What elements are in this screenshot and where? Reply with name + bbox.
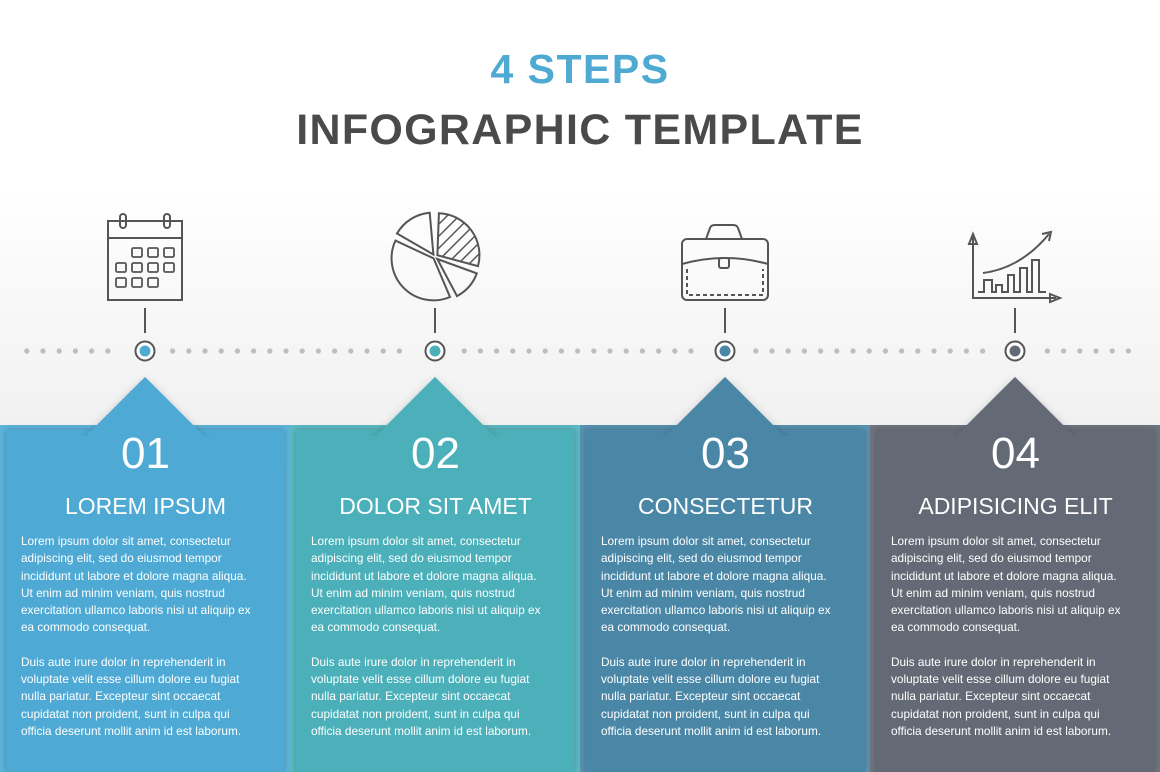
panel texts 3: CONSECTETUR <box>638 493 813 519</box>
icon: calendar <box>107 213 183 301</box>
panel texts 3: Duis aute irure dolor in reprehenderit in voluptate velit esse cillum dolore eu fugiat nulla pariatur. Excepteur sint occaecat cupidatat non proident, sunt in culpa qui officia deserunt mollit anim id est laborum. <box>601 655 821 738</box>
panel 1 <box>0 425 290 772</box>
panel 3 <box>580 425 870 772</box>
panel texts 1: LOREM IPSUM <box>65 493 226 519</box>
title: infographic template: INFOGRAPHIC TEMPLATE <box>296 106 864 154</box>
panel texts 4 <box>891 429 1120 738</box>
icon: briefcase <box>681 224 769 301</box>
panel texts 2: Duis aute irure dolor in reprehenderit in voluptate velit esse cillum dolore eu fugiat nulla pariatur. Excepteur sint occaecat cupidatat non proident, sunt in culpa qui officia deserunt mollit anim id est laborum. <box>311 655 531 738</box>
panel texts 3 <box>601 429 830 738</box>
panel texts 3: Lorem ipsum dolor sit amet, consectetur adipiscing elit, sed do eiusmod tempor incididunt ut labore et dolore magna aliqua. Ut enim ad minim veniam, quis nostrud exercitation ullamco laboris nisi ut aliquip ex ea commodo consequat. <box>601 534 830 634</box>
panel texts 4: ADIPISICING ELIT <box>918 493 1113 519</box>
panel texts 2: Lorem ipsum dolor sit amet, consectetur adipiscing elit, sed do eiusmod tempor incididunt ut labore et dolore magna aliqua. Ut enim ad minim veniam, quis nostrud exercitation ullamco laboris nisi ut aliquip ex ea commodo consequat. <box>311 534 540 634</box>
panel texts 4: Lorem ipsum dolor sit amet, consectetur adipiscing elit, sed do eiusmod tempor incididunt ut labore et dolore magna aliqua. Ut enim ad minim veniam, quis nostrud exercitation ullamco laboris nisi ut aliquip ex ea commodo consequat. <box>891 534 1120 634</box>
panel texts 3: 03 <box>701 429 750 478</box>
panel texts 4: 04 <box>991 429 1040 478</box>
icon: growth chart <box>968 230 1062 304</box>
panel 4 <box>870 425 1160 772</box>
panel texts 2 <box>311 429 540 738</box>
title: 4 steps: 4 STEPS <box>490 46 670 92</box>
panel 2 <box>290 425 580 772</box>
panel texts 2: 02 <box>411 429 460 478</box>
icon: pie chart <box>390 212 480 302</box>
panel texts 4: Duis aute irure dolor in reprehenderit in voluptate velit esse cillum dolore eu fugiat nulla pariatur. Excepteur sint occaecat cupidatat non proident, sunt in culpa qui officia deserunt mollit anim id est laborum. <box>891 655 1111 738</box>
panel texts 1: 01 <box>121 429 170 478</box>
panels <box>0 377 1160 772</box>
panel texts 2: DOLOR SIT AMET <box>339 493 532 519</box>
timeline <box>24 308 1142 362</box>
panel texts 1: Lorem ipsum dolor sit amet, consectetur adipiscing elit, sed do eiusmod tempor incididunt ut labore et dolore magna aliqua. Ut enim ad minim veniam, quis nostrud exercitation ullamco laboris nisi ut aliquip ex ea commodo consequat. <box>21 534 250 634</box>
panel texts 1: Duis aute irure dolor in reprehenderit in voluptate velit esse cillum dolore eu fugiat nulla pariatur. Excepteur sint occaecat cupidatat non proident, sunt in culpa qui officia deserunt mollit anim id est laborum. <box>21 655 241 738</box>
triangles <box>83 377 1074 470</box>
panel texts 1 <box>21 429 250 738</box>
